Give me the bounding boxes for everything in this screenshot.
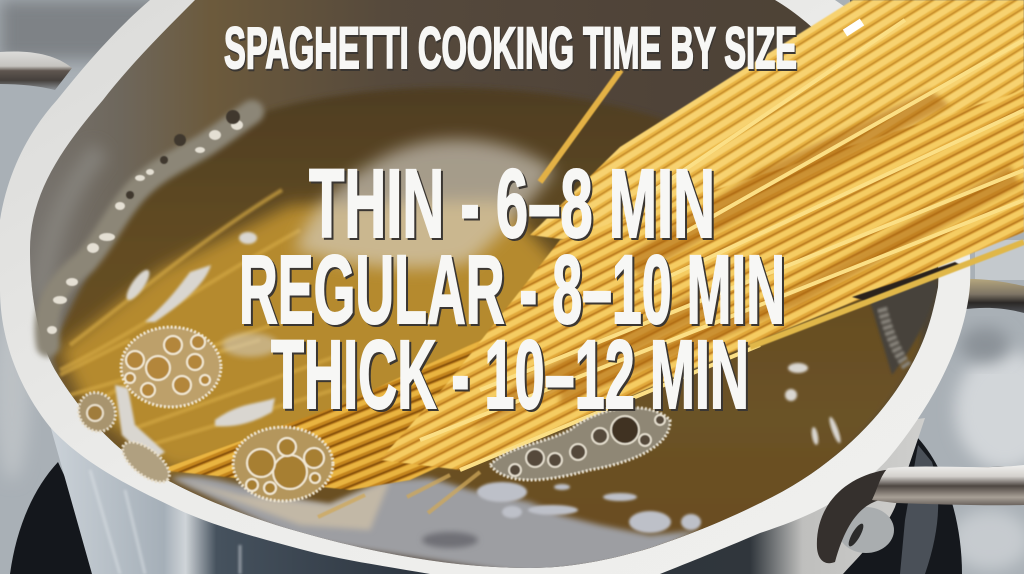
submerged strands	[58, 188, 346, 472]
pot handle: upper right	[960, 279, 1024, 313]
handle bar	[872, 465, 1024, 505]
pot handle: lower right	[817, 465, 1024, 563]
foam reflection: right	[882, 308, 908, 368]
washer slot	[846, 522, 866, 548]
pot handle: upper left	[0, 52, 72, 90]
submerged spaghetti glow	[60, 200, 620, 470]
foam bubbles	[47, 110, 670, 501]
grey reflection: lower water	[170, 476, 700, 574]
rim glint between strands	[845, 22, 862, 33]
strands: highlight strands	[420, 20, 1024, 470]
pot body	[50, 418, 925, 574]
line: thin: THIN - 6–8 MIN	[309, 149, 715, 258]
water and submerged contents	[40, 88, 938, 574]
dark smudge: lower water	[422, 532, 478, 548]
bubble cluster: lower left	[233, 427, 333, 501]
bubble cluster: centre left	[121, 327, 221, 407]
tan haze: lower left water	[175, 478, 390, 530]
strand: stray upper strand	[540, 70, 621, 182]
bubble cluster: bottom centre	[490, 408, 670, 480]
white blobs: lower water	[477, 482, 701, 533]
pot body reflections	[90, 470, 240, 574]
foam highlights	[47, 120, 243, 334]
bubble cluster: rim left	[71, 386, 176, 489]
water surface	[52, 88, 921, 560]
spaghetti bundle	[160, 0, 1024, 490]
strands: lower fan	[168, 340, 482, 491]
foam dark pockets	[126, 110, 240, 199]
foam band	[47, 112, 252, 345]
cooking times text	[239, 149, 785, 429]
strands: middle fan	[380, 90, 1024, 470]
strands: upper fan	[530, 0, 1024, 260]
strand: lowest loose strand	[750, 242, 1024, 347]
glare on water	[115, 139, 843, 462]
strands: dark gap below	[852, 262, 962, 301]
handle arm	[817, 466, 1024, 563]
wall reflection: right	[870, 288, 938, 374]
bubble chain: left wall	[47, 110, 252, 345]
washer	[838, 507, 894, 553]
stove burner	[10, 435, 962, 574]
strands: shaded core	[470, 90, 1020, 430]
loose strands: below bundle	[318, 472, 480, 517]
wall streaks: left grey	[40, 150, 100, 300]
